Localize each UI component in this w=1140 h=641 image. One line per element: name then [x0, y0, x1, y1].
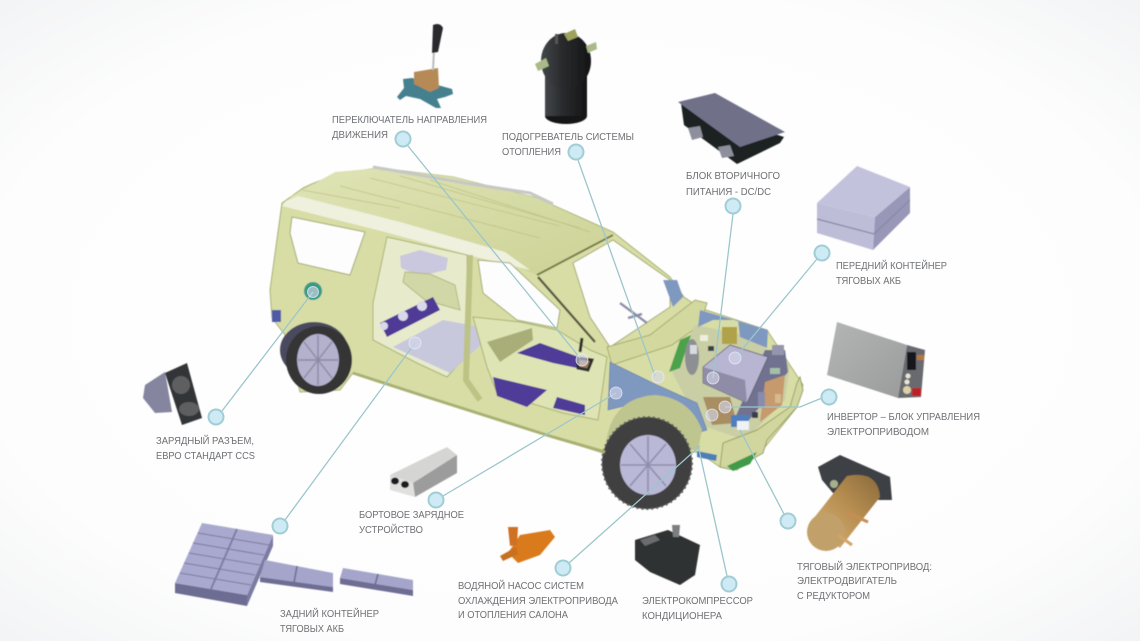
- roof ribs: [302, 176, 590, 238]
- label: onboard charger: [359, 509, 464, 536]
- front battery block: [703, 345, 768, 403]
- floor: [393, 320, 497, 373]
- label: direction switch: [332, 114, 487, 141]
- A pillar: [538, 277, 595, 342]
- callout circles: [208, 132, 836, 592]
- front door window: [478, 260, 560, 328]
- icon: rear battery small pack A: [260, 560, 333, 592]
- label: direction switch: ДВИЖЕНИЯ: [332, 129, 388, 141]
- label: traction drive: С РЕДУКТОРОМ: [797, 590, 870, 602]
- white part: [737, 421, 749, 430]
- bumper green underside: [727, 452, 757, 471]
- blue strut: [698, 310, 768, 348]
- icon: water pump: [500, 527, 555, 563]
- label: inverter: [827, 411, 980, 438]
- label: compressor: КОНДИЦИОНЕРА: [642, 610, 722, 622]
- steering column: [620, 303, 647, 323]
- rear lamp: [272, 310, 281, 322]
- cargo tank support: [403, 272, 460, 310]
- green part: [669, 335, 691, 372]
- icon: front battery container: [817, 166, 910, 250]
- orange stack: [760, 375, 785, 422]
- icon: DC/DC unit: [678, 93, 785, 164]
- label: heater: ПОДОГРЕВАТЕЛЬ СИСТЕМЫ: [502, 131, 634, 143]
- cowl: [607, 300, 707, 365]
- shifter in cabin: [578, 338, 592, 370]
- label: direction switch: ПЕРЕКЛЮЧАТЕЛЬ НАПРАВЛЕНИЯ: [332, 114, 487, 126]
- cargo tank: [400, 250, 448, 276]
- label: charging port: [156, 434, 255, 462]
- lower purple panel left: [493, 377, 547, 407]
- windscreen header: [537, 235, 613, 275]
- front hub spokes: [621, 436, 675, 494]
- windscreen lower blue panel: [663, 280, 683, 307]
- label: water pump: И ОТОПЛЕНИЯ САЛОНА: [458, 609, 568, 621]
- rear side window: [290, 217, 365, 275]
- blue crossbar: [697, 451, 717, 461]
- rear wheel arch: [280, 322, 348, 378]
- rear purple battery panel: [380, 297, 440, 337]
- label: rear battery: ЗАДНИЙ КОНТЕЙНЕР: [280, 607, 379, 620]
- rear hub spokes: [298, 335, 338, 385]
- front hub: [620, 435, 676, 495]
- label: water pump: ВОДЯНОЙ НАСОС СИСТЕМ: [458, 579, 584, 592]
- B pillar: [466, 255, 480, 400]
- label: charging port: ЗАРЯДНЫЙ РАЗЪЕМ,: [156, 434, 254, 447]
- label: traction drive: ТЯГОВЫЙ ЭЛЕКТРОПРИВОД:: [797, 560, 932, 573]
- label: charging port: ЕВРО СТАНДАРТ CCS: [156, 450, 255, 462]
- icon: direction shifter: [397, 24, 453, 108]
- blue fender: [608, 362, 707, 433]
- roof stripe: [282, 196, 530, 270]
- label: water pump: [458, 579, 618, 621]
- gray cylinder: [685, 339, 699, 375]
- lower purple panel right: [553, 397, 585, 415]
- icon: AC compressor: [635, 525, 700, 585]
- olive part: [722, 327, 737, 344]
- component illustrations: [143, 24, 925, 606]
- icon: onboard charger: [390, 447, 457, 497]
- label: water pump: ОХЛАЖДЕНИЯ ЭЛЕКТРОПРИВОДА: [458, 595, 618, 607]
- inner component markers: [308, 286, 741, 421]
- battery sockets: [380, 301, 427, 330]
- charger port hatch: [304, 282, 322, 300]
- brown motor: [703, 397, 737, 425]
- rear tyre: [286, 326, 352, 394]
- label: inverter: ЭЛЕКТРОПРИВОДОМ: [827, 426, 929, 438]
- label: front battery: [836, 259, 947, 287]
- engine bay backdrop: [672, 325, 790, 440]
- icon: rear battery main pack: [175, 523, 273, 606]
- windscreen: [573, 240, 670, 347]
- icon: heater: [535, 29, 597, 124]
- body silhouette: [270, 168, 803, 470]
- label: rear battery: ТЯГОВЫХ АКБ: [280, 623, 344, 635]
- front wheel arch: [605, 395, 702, 452]
- engine clutter: [690, 335, 784, 418]
- dark engine parts: [735, 350, 788, 425]
- blue bits: [731, 415, 749, 427]
- label: inverter: ИНВЕРТОР – БЛОК УПРАВЛЕНИЯ: [827, 411, 980, 423]
- label: DC/DC: ПИТАНИЯ - DC/DC: [686, 186, 771, 198]
- label: heater: [502, 131, 634, 158]
- rear hub: [297, 334, 339, 386]
- label: compressor: ЭЛЕКТРОКОМПРЕССОР: [642, 595, 753, 607]
- label: DC/DC: [686, 170, 780, 198]
- sill: [353, 373, 605, 452]
- icon: rear battery small pack B: [340, 568, 413, 596]
- label: rear battery: [280, 607, 379, 635]
- label: front battery: ТЯГОВЫХ АКБ: [836, 275, 901, 287]
- seat frame: [487, 328, 533, 362]
- front bumper: [720, 377, 803, 470]
- front purple panel: [517, 343, 587, 368]
- label: heater: ОТОПЛЕНИЯ: [502, 146, 561, 158]
- icon: inverter: [827, 322, 925, 398]
- label: traction drive: ЭЛЕКТРОДВИГАТЕЛЬ: [797, 575, 897, 587]
- label: traction drive: [797, 560, 932, 602]
- label: front battery: ПЕРЕДНИЙ КОНТЕЙНЕР: [836, 259, 947, 272]
- roof panel: [290, 168, 613, 275]
- rear door opening: [373, 237, 467, 377]
- label: DC/DC: БЛОК ВТОРИЧНОГО: [686, 170, 780, 182]
- label: onboard charger: БОРТОВОЕ ЗАРЯДНОЕ: [359, 509, 464, 521]
- label: onboard charger: УСТРОЙСТВО: [359, 523, 423, 536]
- leader lines: [222, 146, 822, 576]
- label: compressor: [642, 595, 753, 622]
- front tyre: [602, 417, 692, 509]
- battery side: [703, 367, 747, 403]
- icon: CCS charging socket: [143, 363, 202, 425]
- van body cutaway: [270, 167, 803, 509]
- front door opening: [473, 317, 607, 420]
- roof rail: [373, 167, 553, 204]
- icon: traction motor: [807, 455, 892, 551]
